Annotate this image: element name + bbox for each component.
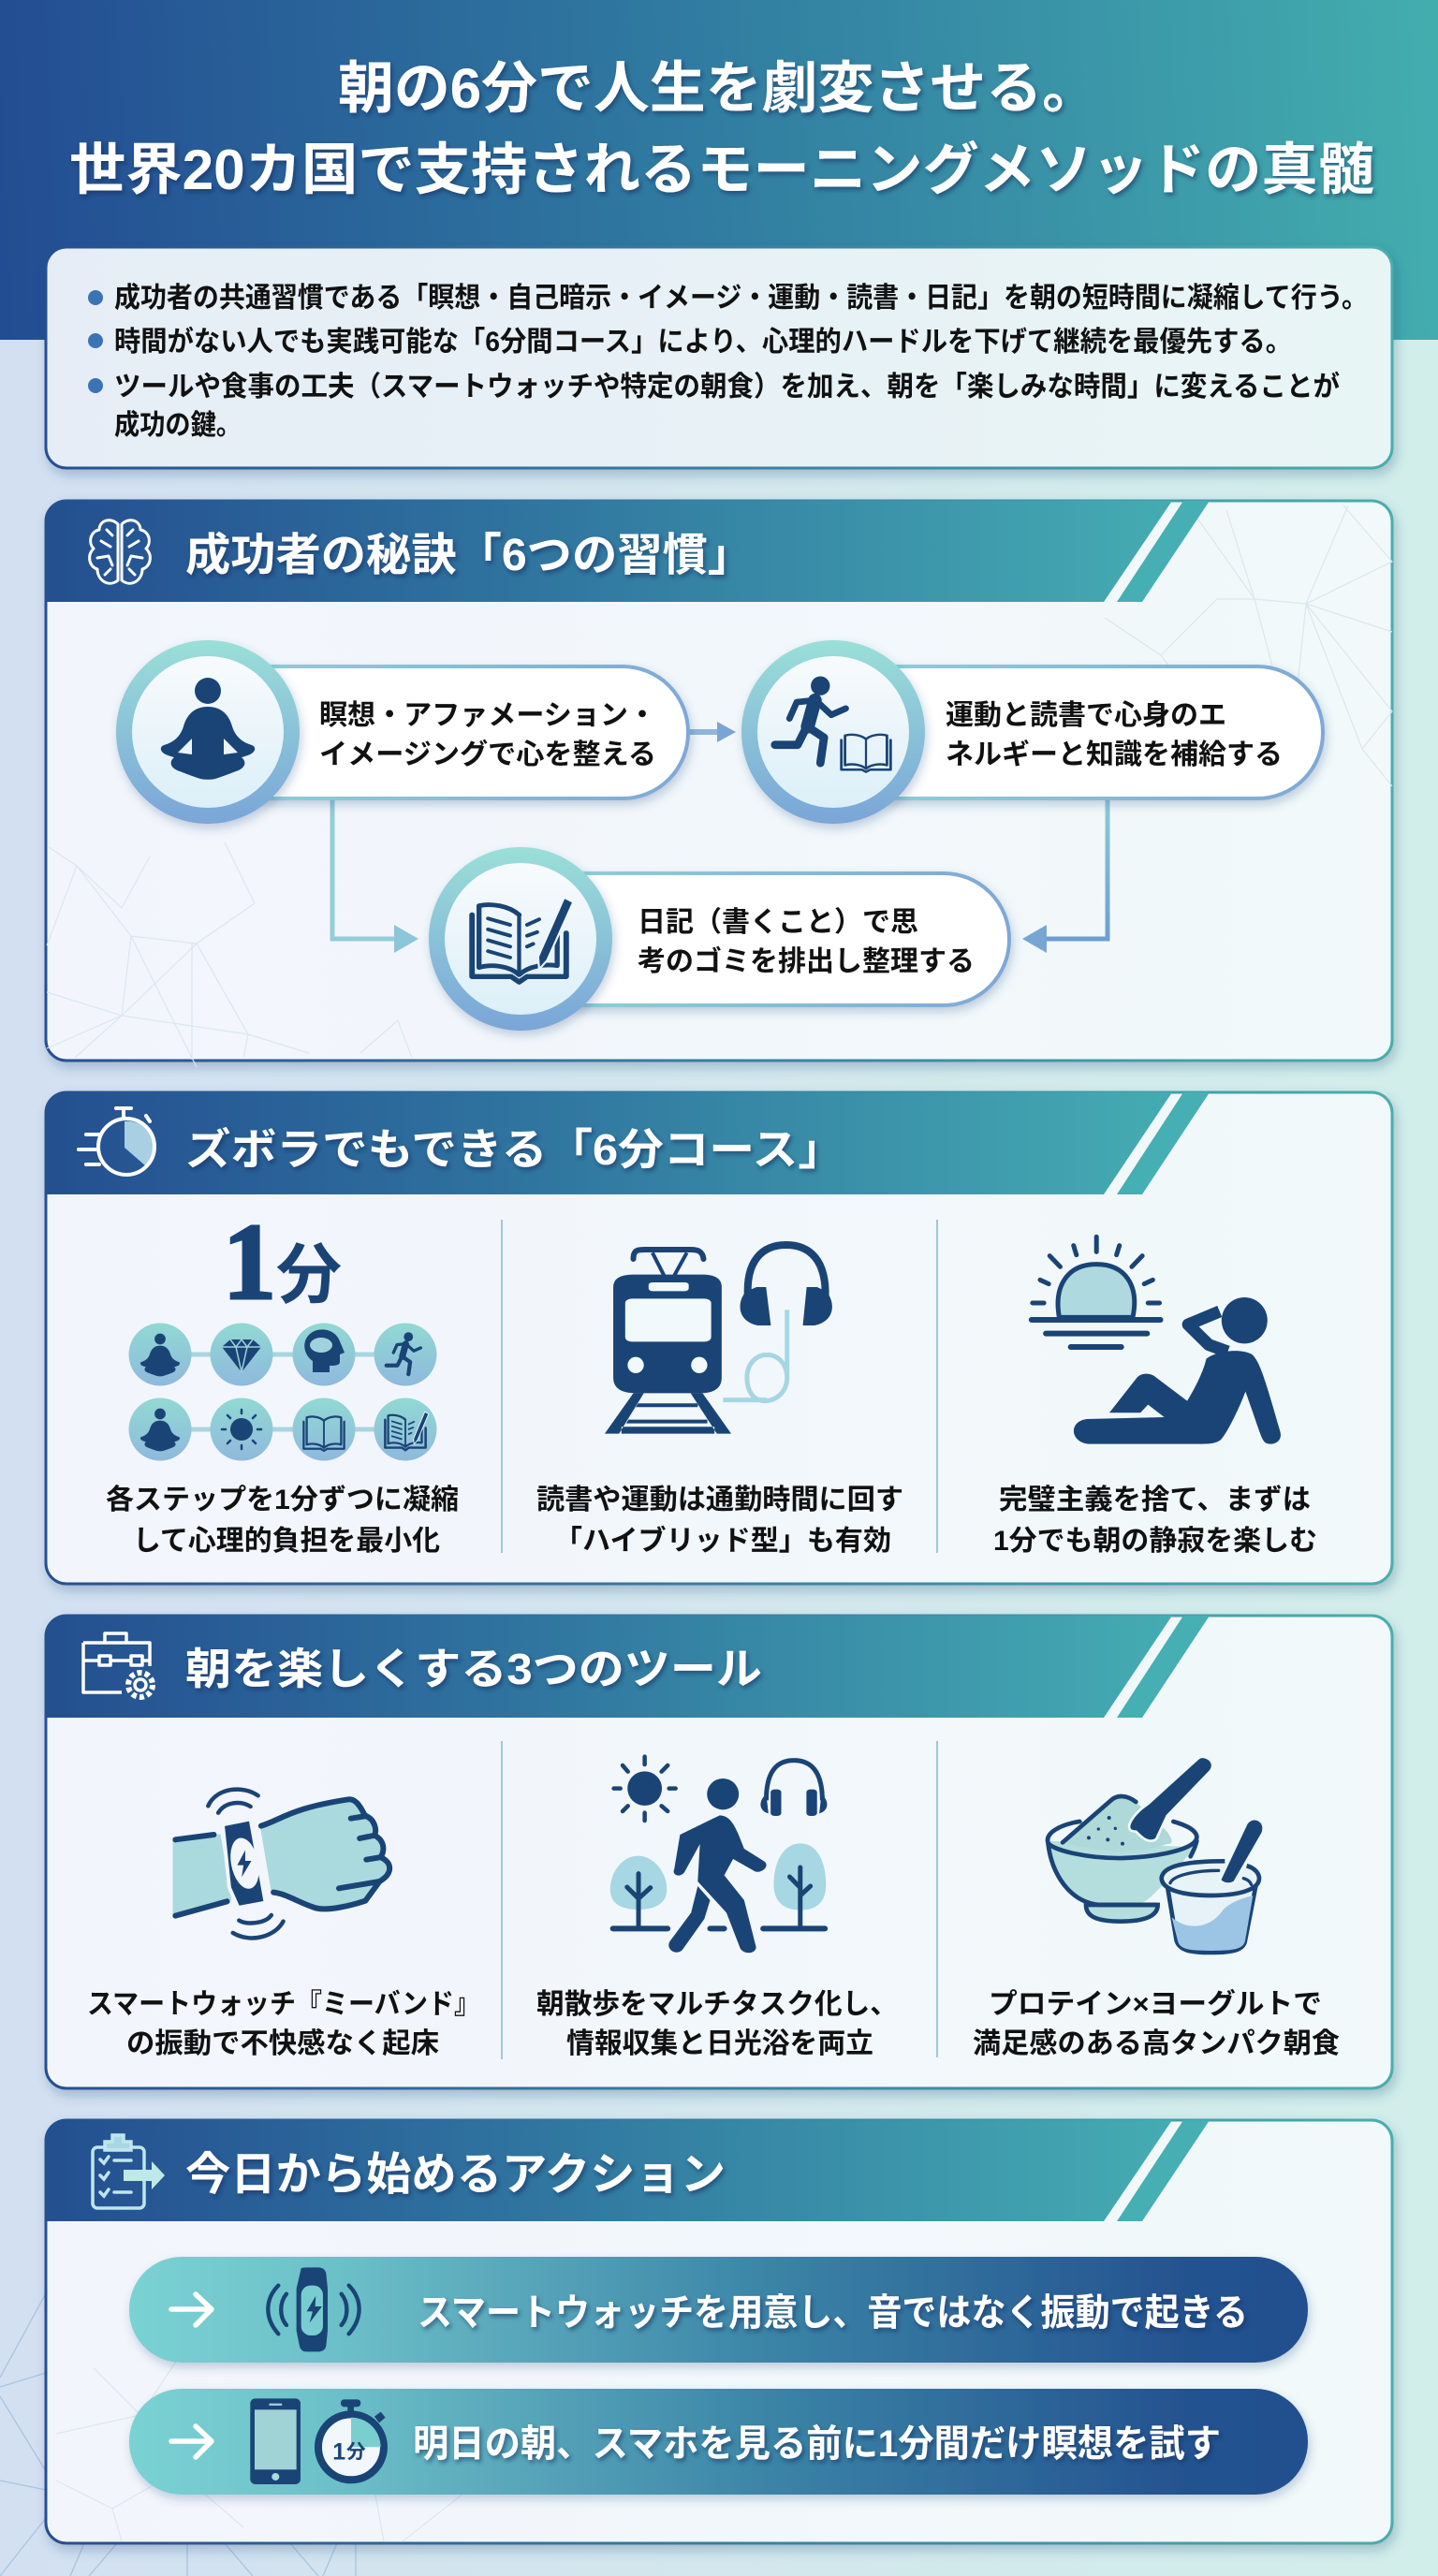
step: exercise and reading: 運動と読書で心身のエ — [946, 700, 1226, 731]
panel: summary — [46, 247, 1392, 468]
icon: vibrating band — [268, 2267, 360, 2351]
step: journaling: 考のゴミを排出し整理する — [638, 945, 975, 977]
section header: six habits — [46, 501, 1210, 602]
icon: phone and stopwatch: 1 — [332, 2438, 345, 2465]
icon: clipboard with arrow — [93, 2135, 165, 2208]
heading: actions: 今日から始めるアクション — [185, 2150, 726, 2200]
step: journaling — [429, 847, 1009, 1031]
step: meditation: 瞑想・アファメーション・ — [319, 700, 656, 731]
connector: step one to diary — [332, 798, 418, 953]
column: smart band: スマートウォッチ『ミーバンド』 — [87, 1989, 480, 2020]
icon: brain — [90, 520, 150, 583]
icon: train and headphones — [605, 1245, 832, 1434]
column: one minute steps: して心理的負担を最小化 — [133, 1526, 440, 1557]
title: 世界20カ国で支持されるモーニングメソッドの真髄 — [69, 139, 1374, 201]
panel: six minute course — [46, 1092, 1392, 1584]
icon: sunrise and resting person — [1032, 1237, 1281, 1444]
column: smart band — [87, 1790, 480, 2059]
title: 朝の6分で人生を劇変させる。 — [338, 57, 1098, 120]
column: smart band: の振動で不快感なく起床 — [126, 2028, 439, 2059]
panel: three tools — [46, 1616, 1392, 2088]
icon: phone and stopwatch: 分 — [346, 2441, 366, 2463]
icon: meditation — [161, 678, 255, 780]
panel: summary: 成功の鍵。 — [114, 410, 242, 441]
icon: walker with sun and headphones — [610, 1757, 827, 1953]
arrow — [171, 2294, 212, 2325]
panel: actions — [46, 2120, 1392, 2543]
panel: summary: 成功者の共通習慣である「瞑想・自己暗示・イメージ・運動・読書・日記」を朝の短時間に凝縮して行う。 — [114, 283, 1368, 314]
column: morning walk: 情報収集と日光浴を両立 — [566, 2028, 873, 2059]
big number: one minute — [223, 1202, 342, 1323]
connector: step two to diary — [1022, 798, 1108, 953]
section header: actions — [46, 2120, 1210, 2221]
icon: stopwatch — [79, 1108, 154, 1175]
action: one minute meditation — [129, 2389, 1308, 2495]
column: enjoy morning calm: 1分でも朝の静寂を楽しむ — [993, 1526, 1317, 1557]
big number: one minute: 分 — [276, 1238, 342, 1311]
heading: three tools: 朝を楽しくする3つのツール — [185, 1645, 762, 1693]
heading: six minute course: ズボラでもできる「6分コース」 — [185, 1125, 844, 1174]
icon: phone and stopwatch — [250, 2398, 386, 2484]
step: exercise and reading — [741, 640, 1323, 824]
column: hybrid commute: 「ハイブリッド型」も有効 — [554, 1525, 891, 1557]
top gradient band — [0, 0, 1438, 340]
step: exercise and reading: ネルギーと知識を補給する — [946, 739, 1283, 770]
column: one minute steps — [106, 1202, 459, 1557]
section header: six minute course — [46, 1092, 1210, 1194]
panel: summary: 時間がない人でも実践可能な「6分間コース」により、心理的ハードルを下げて継続を最優先する。 — [114, 326, 1292, 358]
flow arrow: step one to step two — [690, 722, 736, 742]
background network pattern — [0, 2293, 356, 2576]
icon: toolbox and gear — [83, 1633, 153, 1697]
icon: journal and pen — [472, 898, 573, 982]
panel: summary: ツールや食事の工夫（スマートウォッチや特定の朝食）を加え、朝を「楽しみな時間」に変えることが — [114, 371, 1340, 402]
step: meditation — [116, 640, 688, 824]
arrow — [171, 2426, 212, 2457]
column: hybrid commute — [536, 1245, 903, 1557]
column: protein breakfast — [973, 1757, 1340, 2059]
section header: three tools — [46, 1616, 1210, 1718]
heading: six habits: 成功者の秘訣「6つの習慣」 — [185, 531, 753, 580]
column: one minute steps: 各ステップを1分ずつに凝縮 — [106, 1485, 459, 1515]
column: morning walk: 朝散歩をマルチタスク化し、 — [536, 1989, 898, 2020]
action: one minute meditation: 明日の朝、スマホを見る前に1分間だけ瞑想を試す — [413, 2423, 1221, 2465]
column: hybrid commute: 読書や運動は通勤時間に回す — [536, 1485, 903, 1515]
icon: runner and book — [775, 676, 890, 772]
icon: wrist with smart band — [173, 1790, 389, 1938]
step: meditation: イメージングで心を整える — [319, 739, 656, 770]
icon: protein bowl and yogurt — [1048, 1757, 1263, 1953]
column: protein breakfast: 満足感のある高タンパク朝食 — [973, 2028, 1340, 2059]
big number: one minute: 1 — [223, 1202, 276, 1323]
column: enjoy morning calm — [993, 1237, 1317, 1557]
title — [69, 57, 1374, 201]
step: journaling: 日記（書くこと）で思 — [638, 907, 918, 938]
column: protein breakfast: プロテイン×ヨーグルトで — [989, 1989, 1322, 2020]
action: smartwatch — [129, 2257, 1308, 2363]
action: smartwatch: スマートウォッチを用意し、音ではなく振動で起きる — [418, 2292, 1248, 2334]
icon grid: eight mini steps — [129, 1324, 436, 1460]
panel: six habits — [46, 501, 1392, 1067]
column: morning walk — [536, 1757, 898, 2059]
column: enjoy morning calm: 完璧主義を捨て、まずは — [999, 1485, 1311, 1515]
